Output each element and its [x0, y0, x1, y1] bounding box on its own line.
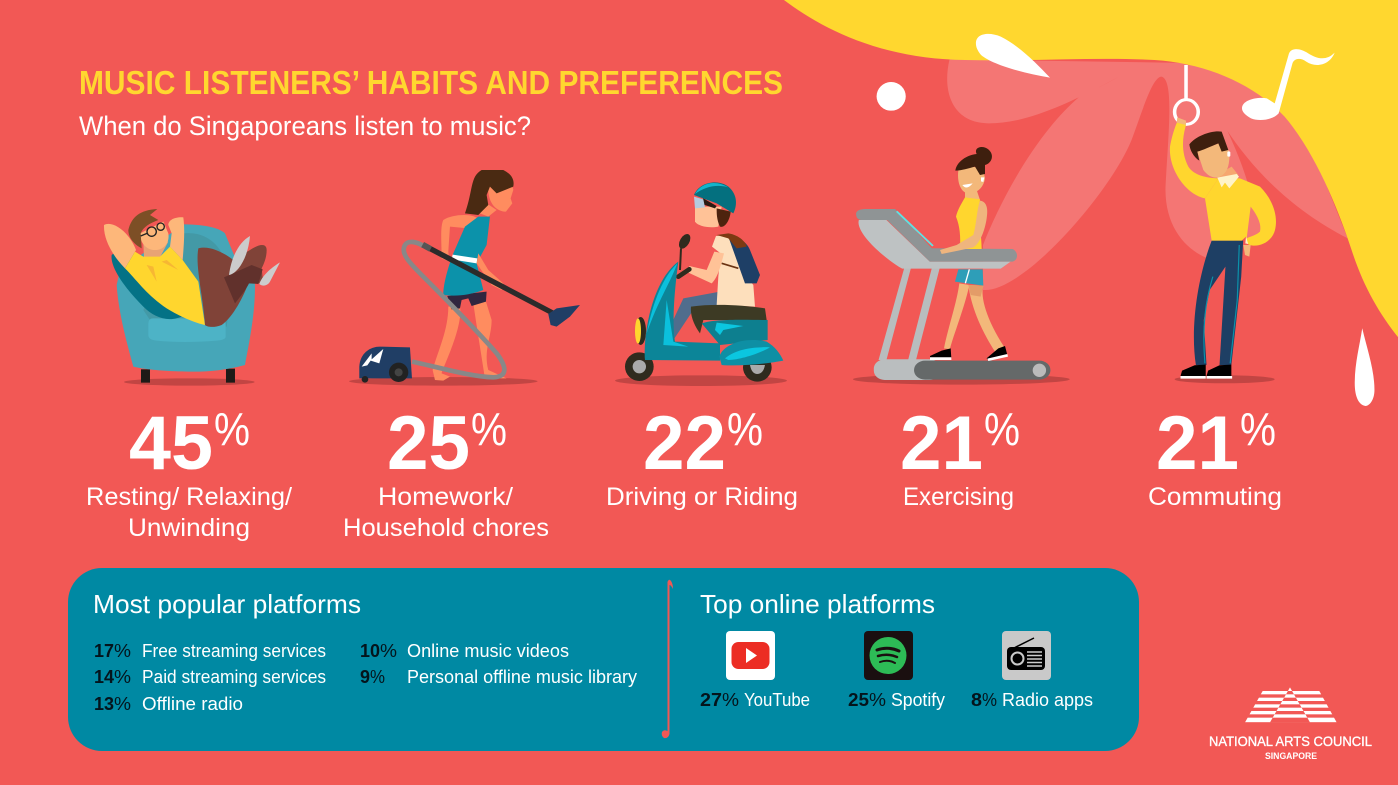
stat: commuting: 21 [1156, 401, 1239, 486]
label: radio apps: 8 [971, 690, 982, 710]
stat: driving [606, 401, 798, 511]
stat: chores: Homework/ [378, 483, 513, 511]
list: most popular platforms: Personal offline music library [407, 667, 637, 687]
label: YouTube: YouTube [744, 690, 810, 710]
list: most popular platforms [94, 641, 637, 714]
label: YouTube: 27 [700, 690, 722, 710]
stat: resting [86, 401, 292, 542]
label: YouTube: % [722, 690, 739, 710]
icon: radio [1002, 631, 1051, 680]
list: most popular platforms: 10 [360, 641, 380, 661]
list: most popular platforms: 17 [94, 641, 114, 661]
list: most popular platforms: % [114, 667, 131, 687]
stat: driving: 22 [643, 401, 726, 486]
heading: top online platforms: Top online platforms [700, 589, 935, 619]
label: Spotify: Spotify [891, 690, 945, 710]
list: most popular platforms: 13 [94, 694, 114, 714]
list: most popular platforms: % [114, 641, 131, 661]
label: Spotify: 25 [848, 690, 869, 710]
illustration: man relaxing in armchair [104, 209, 280, 386]
stat: exercising: % [984, 403, 1020, 455]
stat: chores: Household chores [343, 514, 549, 542]
stat: commuting [1148, 401, 1282, 511]
list: most popular platforms: Offline radio [142, 694, 243, 714]
stat: exercising: Exercising [903, 483, 1014, 511]
stat: commuting: % [1240, 403, 1276, 455]
stat: resting: % [214, 403, 250, 455]
stat: resting: Resting/ Relaxing/ [86, 483, 292, 511]
list: most popular platforms: 14 [94, 667, 114, 687]
label: radio apps: Radio apps [1002, 690, 1093, 710]
stat: chores: 25 [387, 401, 470, 486]
divider: note stem [662, 580, 673, 738]
icon: YouTube [726, 631, 775, 680]
illustration: rider on scooter [615, 182, 787, 386]
label: radio apps: % [982, 690, 997, 710]
label: YouTube [700, 690, 810, 710]
list: most popular platforms: % [114, 694, 131, 714]
stat: resting: Unwinding [128, 514, 250, 542]
heading: most popular platforms: Most popular platforms [93, 589, 361, 619]
list: most popular platforms: Online music videos [407, 641, 569, 661]
stat: commuting: Commuting [1148, 483, 1282, 511]
stat: exercising [900, 401, 1020, 511]
subtitle: When do Singaporeans listen to music? [79, 111, 531, 141]
decorative white shapes and music note [877, 34, 1374, 406]
stat: chores [343, 401, 549, 542]
list: most popular platforms: 9 [360, 667, 370, 687]
stat: driving: % [727, 403, 763, 455]
illustration: woman on treadmill [853, 147, 1070, 385]
stat: resting: 45 [129, 401, 213, 486]
label: Spotify: % [869, 690, 886, 710]
logo: National Arts Council: SINGAPORE [1265, 751, 1317, 761]
list: most popular platforms: % [370, 667, 385, 687]
stat: driving: Driving or Riding [606, 483, 798, 511]
stat: chores: % [471, 403, 507, 455]
list: most popular platforms: Paid streaming services [142, 667, 326, 687]
icon: Spotify [864, 631, 913, 680]
list: most popular platforms: % [380, 641, 397, 661]
label: Spotify [848, 690, 945, 710]
title: MUSIC LISTENERS’ HABITS AND PREFERENCES [79, 64, 783, 101]
stat: exercising: 21 [900, 401, 983, 486]
panel: platforms [68, 568, 1139, 751]
logo: National Arts Council [1209, 687, 1372, 761]
illustration: commuter holding strap [1170, 65, 1276, 383]
background blobs [784, 0, 1398, 337]
logo: National Arts Council: NATIONAL ARTS COUNCIL [1209, 733, 1372, 749]
list: most popular platforms: Free streaming services [142, 641, 326, 661]
illustration: woman vacuuming [349, 170, 580, 386]
